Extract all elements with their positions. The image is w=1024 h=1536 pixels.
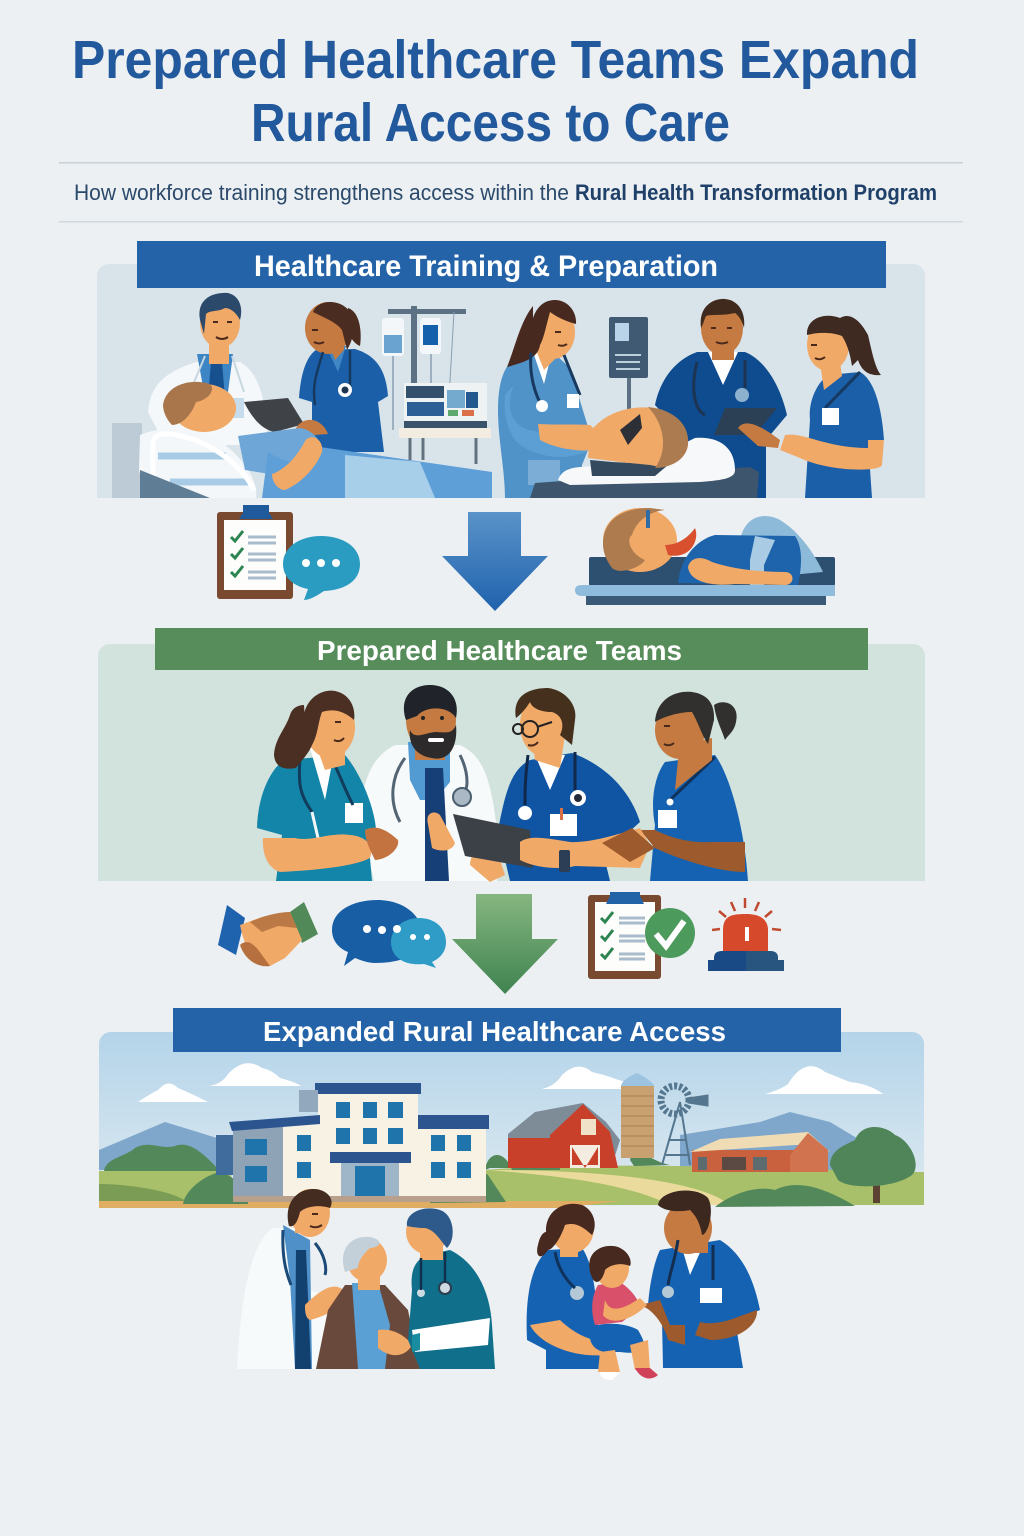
icon: clipboard and speech bubble (217, 505, 360, 600)
heading: training (137, 241, 886, 288)
farmhouse (690, 1132, 830, 1172)
hospital (216, 1083, 489, 1202)
child (589, 1246, 658, 1380)
care group: nurses and child (527, 1191, 760, 1380)
panel: healthcare training (97, 241, 925, 498)
road (490, 1170, 730, 1205)
clouds (138, 1063, 883, 1102)
sky (99, 1032, 924, 1208)
wall monitor (609, 317, 648, 418)
nurse with glasses (498, 688, 640, 881)
nurse right (640, 1191, 760, 1368)
title (72, 30, 919, 153)
panel: expanded access scene (99, 1032, 924, 1208)
patient on bed (163, 382, 492, 498)
icon: speech bubbles (332, 900, 446, 968)
teal nurse (406, 1208, 495, 1369)
heading: prepared teams: Prepared Healthcare Teams (317, 635, 682, 666)
subtitle (74, 180, 937, 205)
icon: checklist with check badge (588, 892, 695, 979)
tree (830, 1127, 916, 1203)
title: Rural Access to Care (251, 93, 730, 153)
icon: emergency siren (708, 898, 784, 971)
heading: expanded access (173, 1008, 841, 1052)
hospital bed (112, 423, 256, 498)
doctor in white coat (148, 293, 268, 445)
teal nurse (257, 691, 398, 881)
nurse with tablet (244, 302, 388, 452)
training manikin on table (530, 407, 759, 498)
arrow: down blue (442, 512, 548, 611)
icon: patient lying on table (575, 508, 835, 605)
icon: handshake (218, 902, 318, 966)
older patient (316, 1237, 420, 1369)
heading: expanded access: Expanded Rural Healthcare Access (263, 1016, 726, 1047)
fields (99, 1166, 924, 1205)
trees and bushes (104, 1145, 855, 1207)
barn (508, 1103, 620, 1168)
subtitle: How workforce training strengthens access within the (74, 180, 569, 205)
nurse with dark hair (640, 692, 748, 881)
windmill (661, 1086, 708, 1165)
IV pole and monitor (382, 306, 491, 464)
nurse with ponytail, right (780, 316, 884, 498)
nurse with tablet, navy scrubs (655, 299, 787, 498)
title: Prepared Healthcare Teams Expand (72, 30, 919, 90)
mountains (99, 1112, 870, 1170)
panel: prepared teams (98, 628, 925, 882)
nurse left (527, 1203, 605, 1369)
care group: doctor, older patient, nurse (237, 1189, 495, 1369)
nurse in light blue (498, 300, 603, 498)
panel background (98, 644, 925, 881)
silo (621, 1073, 654, 1158)
subtitle: Rural Health Transformation Program (575, 180, 937, 205)
arrow: down green (452, 894, 558, 994)
panel background (97, 264, 925, 498)
heading: prepared teams (155, 628, 868, 670)
doctor with beard (360, 685, 505, 882)
heading: training: Healthcare Training & Preparation (254, 250, 718, 283)
tablet and hands (453, 814, 655, 872)
doctor (237, 1189, 345, 1369)
